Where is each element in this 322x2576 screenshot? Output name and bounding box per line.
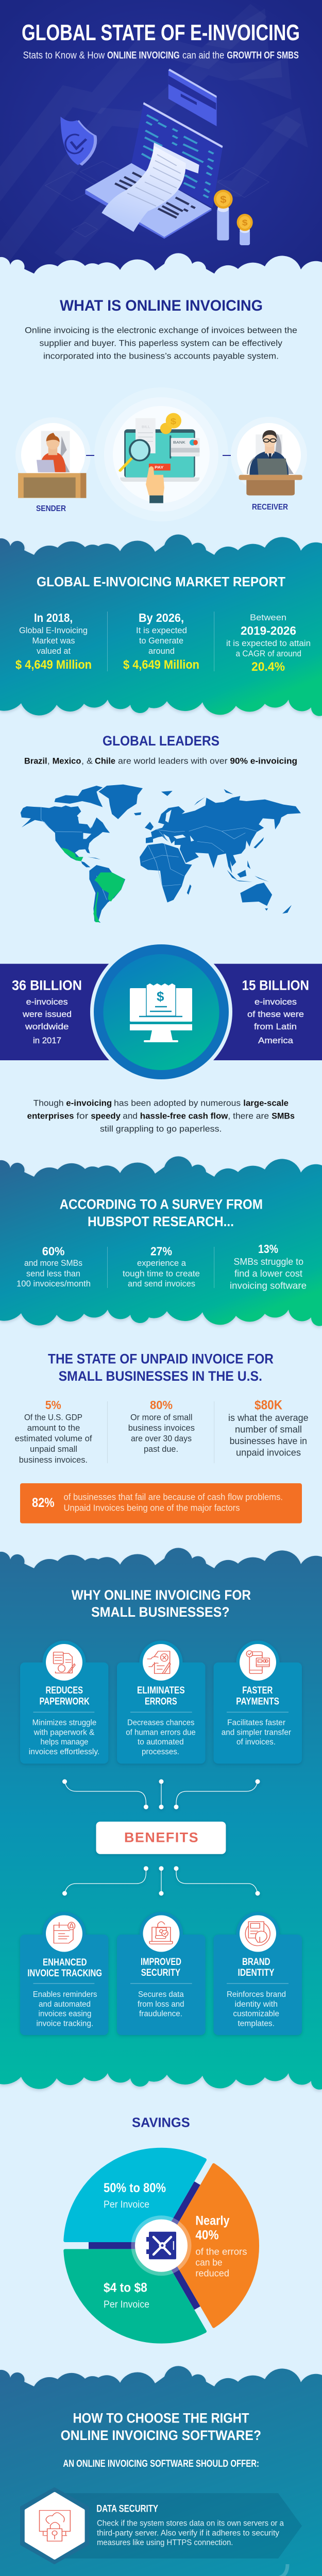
hero subtitle	[23, 50, 299, 61]
card: faster payments: PAYMENTS	[236, 1696, 279, 1707]
callout: 82 percent: 82%	[32, 1496, 55, 1510]
card: reduces paperwork: REDUCES	[45, 1685, 83, 1696]
item: data security: DATA SECURITY	[96, 2504, 158, 2515]
text: online invoicing definition	[25, 326, 297, 361]
stat: 2026 value	[123, 611, 199, 672]
card: reduces paperwork: helps manage	[40, 1738, 88, 1747]
card: improved security: IMPROVED	[141, 1957, 181, 1968]
hero subtitle: ONLINE INVOICING	[107, 50, 180, 61]
card: eliminates errors: of human errors due	[126, 1728, 196, 1737]
card: faster payments: of invoices.	[236, 1738, 276, 1747]
panel: why online invoicing	[0, 1548, 322, 2090]
heading: survey: HUBSPOT RESEARCH...	[88, 1214, 234, 1229]
text: adoption paragraph: e-invoicing	[66, 1098, 112, 1108]
text: adoption paragraph: has been adopted by numerous	[114, 1098, 241, 1108]
text: adoption paragraph: hassle-free cash flow	[140, 1111, 228, 1121]
text: global leaders summary	[24, 757, 297, 766]
stat: CAGR: 20.4%	[251, 660, 285, 674]
card: invoice tracking	[20, 1912, 108, 2035]
stat: 80 percent past due: Or more of small	[130, 1413, 193, 1422]
hero subtitle: can aid the	[182, 50, 224, 61]
card: reduces paperwork: with paperwork &	[33, 1728, 95, 1737]
connectors: out of benefits	[62, 1866, 260, 1896]
card: improved security: Secures data	[138, 1990, 184, 1999]
panel: hubspot survey	[0, 1156, 322, 1326]
stat: 13 percent: SMBs struggle to	[234, 1256, 303, 1267]
callout: benefits	[96, 1822, 226, 1854]
label: sender: SENDER	[36, 504, 66, 513]
slice: orange: can be	[195, 2257, 223, 2267]
slice: green	[65, 2250, 205, 2342]
text: adoption paragraph: speedy	[91, 1111, 121, 1121]
card: brand identity: customizable	[233, 2010, 279, 2019]
stat: CAGR: a CAGR of around	[236, 649, 301, 658]
text: global leaders summary: 90% e-invoicing	[230, 757, 297, 766]
stat: CAGR: it is expected to attain	[226, 638, 311, 648]
card: improved security: SECURITY	[141, 1968, 180, 1978]
stat: 60 percent: send less than	[26, 1269, 80, 1279]
icon: laptop payment: BANK	[173, 440, 186, 445]
stat: 36 billion: e-invoices	[26, 997, 68, 1007]
stat: CAGR: Between	[250, 613, 286, 622]
text: global leaders summary: , &	[81, 757, 93, 766]
card: faster payments	[213, 1640, 302, 1764]
heading: how to choose: HOW TO CHOOSE THE RIGHT	[73, 2410, 249, 2426]
circle: invoice monitor badge: $	[157, 989, 164, 1004]
text: online invoicing definition: supplier and buyer. This paperless system can be effectively	[39, 338, 283, 348]
icon: laptop payment	[94, 387, 228, 521]
card: improved security	[117, 1912, 206, 2035]
stat: 15 billion: America	[258, 1036, 294, 1045]
card: improved security: fraudulence.	[139, 2010, 182, 2019]
icon: brand book and bulb	[245, 1922, 270, 1946]
text: global leaders summary: are world leaders with over	[118, 757, 228, 766]
stat: 2018 value: Global E-Invoicing	[19, 625, 88, 635]
card: brand identity: identity with	[235, 2000, 278, 2009]
slice: blue	[65, 2149, 205, 2241]
card: eliminates errors: ELIMINATES	[137, 1685, 185, 1696]
heading: global leaders: GLOBAL LEADERS	[103, 733, 219, 749]
icon: payments	[246, 1651, 269, 1673]
text: global leaders summary: Mexico	[53, 757, 81, 766]
card: brand identity: Reinforces brand	[227, 1990, 286, 1999]
icon: laptop lock	[149, 1922, 173, 1944]
icon: paperwork	[54, 1652, 75, 1673]
stat: CAGR	[226, 613, 311, 674]
text: adoption paragraph: and	[123, 1111, 138, 1121]
heading: why	[72, 1587, 251, 1620]
card: invoice tracking: invoices easing	[38, 2010, 91, 2019]
card: faster payments: FASTER	[242, 1685, 273, 1696]
hero background	[0, 0, 322, 281]
stat: 2026 value: It is expected	[136, 625, 187, 635]
icon: sender at desk	[15, 417, 91, 498]
card: reduces paperwork: PAPERWORK	[39, 1696, 90, 1707]
text: global leaders summary: Chile	[95, 757, 115, 766]
stat: 5 percent of GDP	[15, 1398, 92, 1465]
stat: CAGR: 2019-2026	[241, 624, 296, 637]
callout: 82 percent: of businesses that fail are because of cash flow problems.	[64, 1492, 283, 1502]
subheading: should offer: AN ONLINE INVOICING SOFTWARE SHOULD OFFER:	[63, 2459, 259, 2469]
slice: orange: reduced	[195, 2268, 229, 2278]
heading: state of unpaid invoice	[48, 1351, 274, 1384]
stat: 5 percent of GDP: unpaid small	[30, 1444, 77, 1454]
stat: 27 percent: tough time to create	[123, 1269, 200, 1279]
dividers	[107, 612, 214, 671]
heading: survey	[60, 1197, 263, 1229]
slice: orange: 40%	[195, 2228, 218, 2243]
callout: 82 percent: Unpaid Invoices being one of the major factors	[64, 1503, 240, 1513]
panel: market report	[0, 534, 322, 716]
card: reduces paperwork: Minimizes struggle	[32, 1718, 96, 1727]
heading: why: WHY ONLINE INVOICING FOR	[72, 1587, 251, 1603]
panel background	[0, 534, 322, 716]
stat: 80 percent past due: business invoices	[128, 1423, 195, 1433]
card: brand identity: IDENTITY	[238, 1968, 275, 1978]
stat: 60 percent: 100 invoices/month	[16, 1279, 91, 1289]
panel background	[0, 1156, 322, 1326]
circle: invoice monitor badge	[90, 941, 232, 1083]
text: adoption paragraph: SMBs	[272, 1111, 295, 1121]
hero illustration: laptop with invoice, card, shield and coins	[61, 69, 253, 245]
stat: 13 percent: 13%	[258, 1242, 278, 1256]
stat: 80K average: $80K	[255, 1398, 282, 1413]
stat: 2018 value: $ 4,649 Million	[15, 658, 92, 672]
stat: 2026 value: around	[148, 646, 175, 656]
slice: green: $4 to $8	[104, 2280, 147, 2295]
stat: 15 billion: e-invoices	[255, 997, 297, 1007]
card: invoice tracking: and automated	[39, 2000, 91, 2009]
stat: 2018 value: Market was	[32, 636, 75, 646]
heading: state of unpaid invoice: THE STATE OF UNPAID INVOICE FOR	[48, 1351, 274, 1367]
panel: how to choose	[0, 2366, 322, 2576]
card: invoice tracking: Enables reminders	[33, 1990, 97, 1999]
card: brand identity: templates.	[238, 2019, 275, 2028]
heading: how to choose	[61, 2410, 261, 2443]
connectors between items	[34, 2564, 287, 2576]
stat: 15 billion: of these were	[247, 1009, 304, 1019]
stat: 80 percent past due	[128, 1398, 195, 1454]
dividers	[107, 1247, 214, 1288]
stat: 5 percent of GDP: amount to the	[27, 1423, 80, 1433]
card: brand identity	[213, 1912, 302, 2035]
item: data security: Check if the system stores data on its own servers or a	[97, 2519, 284, 2528]
band background	[0, 964, 322, 1060]
card: reduces paperwork	[20, 1640, 108, 1764]
card: eliminates errors: processes.	[142, 1748, 179, 1756]
stat: 5 percent of GDP: business invoices.	[19, 1455, 88, 1465]
stat: 27 percent: and send invoices	[128, 1279, 195, 1289]
stat: 80 percent past due: are over 30 days	[131, 1434, 192, 1444]
text: adoption paragraph: enterprises	[27, 1111, 74, 1121]
text: adoption paragraph: Though	[33, 1098, 64, 1108]
panel background	[0, 1548, 322, 2090]
icon: errors	[147, 1651, 171, 1673]
diagram: sender to payment to receiver	[15, 387, 307, 521]
icon: laptop payment: BILL	[142, 425, 150, 429]
card: invoice tracking: ENHANCED	[43, 1957, 87, 1968]
stat: 60 percent	[16, 1245, 91, 1289]
label: receiver: RECEIVER	[252, 503, 288, 512]
text: adoption paragraph: still grappling to go paperless.	[100, 1124, 222, 1134]
stat: 27 percent	[123, 1245, 200, 1289]
card: faster payments: Facilitates faster	[227, 1718, 285, 1727]
text: adoption paragraph: large-scale	[243, 1098, 289, 1108]
callout: benefits: BENEFITS	[124, 1830, 198, 1845]
icon: laptop	[85, 102, 223, 239]
item: data security: measures like using HTTPS connection.	[97, 2538, 233, 2547]
stat: 5 percent of GDP: Of the U.S. GDP	[24, 1413, 82, 1422]
stat: 36 billion: were issued	[22, 1009, 72, 1019]
text: online invoicing definition: Online invoicing is the electronic exchange of invoices between the	[25, 326, 297, 335]
card: eliminates errors: ERRORS	[145, 1696, 177, 1707]
slice: orange	[167, 2165, 258, 2327]
card: improved security: from loss and	[138, 2000, 184, 2009]
card: faster payments: and simpler transfer	[222, 1728, 291, 1737]
stat: 36 billion	[12, 978, 82, 1045]
heading: what is online invoicing: WHAT IS ONLINE INVOICING	[60, 297, 263, 314]
stat: 80K average	[228, 1398, 309, 1458]
callout: 82 percent	[20, 1483, 302, 1523]
stat: 15 billion: from Latin	[254, 1022, 297, 1031]
stat: 13 percent: find a lower cost	[234, 1268, 302, 1279]
text: global leaders summary: Brazil	[24, 757, 47, 766]
stat: 2018 value: valued at	[37, 646, 71, 656]
chart: savings pie	[65, 2149, 258, 2342]
stat: 27 percent: experience a	[137, 1258, 187, 1268]
text: online invoicing definition: incorporated into the business’s accounts payable system.	[43, 351, 279, 361]
slice: green: Per Invoice	[104, 2299, 149, 2310]
stat: 2018 value	[15, 611, 92, 672]
icon: cloud lock	[40, 2511, 70, 2541]
card: invoice tracking: INVOICE TRACKING	[27, 1968, 102, 1979]
stat: 13 percent: invoicing software	[230, 1280, 307, 1291]
icon: coin stacks: $	[242, 218, 248, 227]
icon: laptop payment: $	[171, 416, 176, 426]
icon: credit card	[168, 69, 217, 126]
icon: coin stacks: $	[220, 195, 226, 205]
card: eliminates errors: Decreases chances	[127, 1718, 195, 1727]
item: data security: third-party server. Also verify if it adheres to security	[97, 2529, 279, 2538]
connectors: into benefits	[62, 1780, 260, 1809]
slice: blue: Per Invoice	[104, 2199, 149, 2210]
heading: why: SMALL BUSINESSES?	[91, 1604, 230, 1620]
icon: coin stacks	[214, 190, 253, 245]
card: eliminates errors: to automated	[138, 1738, 184, 1747]
stat: 60 percent: and more SMBs	[24, 1258, 82, 1268]
stat: 80K average: is what the average	[228, 1412, 309, 1423]
arrow: payment to receiver	[223, 451, 237, 461]
chart: world map with leaders highlighted	[21, 785, 301, 923]
heading: savings: SAVINGS	[132, 2114, 190, 2130]
stat: 80K average: number of small	[235, 1424, 302, 1435]
hero subtitle: GROWTH OF SMBS	[227, 50, 299, 61]
heading: how to choose: ONLINE INVOICING SOFTWARE?	[61, 2428, 261, 2443]
stat: 5 percent of GDP: 5%	[45, 1398, 61, 1412]
text: global leaders summary: ,	[47, 757, 50, 766]
stat: 2026 value: By 2026,	[139, 611, 184, 624]
stat: 5 percent of GDP: estimated volume of	[15, 1434, 92, 1444]
stat: 80K average: businesses have in	[230, 1435, 307, 1446]
stat: 13 percent	[230, 1242, 307, 1291]
heading: state of unpaid invoice: SMALL BUSINESSES IN THE U.S.	[59, 1368, 262, 1384]
icon: calendar bell	[54, 1922, 75, 1943]
slice: orange: of the errors	[195, 2247, 247, 2257]
stat: 36 billion: worldwide	[25, 1022, 69, 1031]
icon: receiver at desk	[231, 417, 307, 496]
stat: 80 percent past due: 80%	[150, 1398, 173, 1412]
item: data security	[22, 2489, 302, 2563]
text: adoption paragraph: , there are	[228, 1111, 269, 1121]
stat: 2026 value: $ 4,649 Million	[123, 658, 199, 672]
arrow: sender to payment	[86, 451, 100, 461]
icon: safe	[131, 2215, 192, 2276]
panel background	[0, 2366, 322, 2576]
card: eliminates errors	[117, 1640, 206, 1764]
hero subtitle: Stats to Know & How	[23, 50, 105, 61]
stat: 2018 value: In 2018,	[34, 611, 73, 624]
card: brand identity: BRAND	[242, 1957, 270, 1968]
stat: 80K average: unpaid invoices	[236, 1447, 301, 1458]
stat: 15 billion	[242, 978, 309, 1045]
panel: worldwide invoices band	[0, 941, 322, 1083]
icon: shield	[61, 117, 97, 166]
text: adoption paragraph: for	[76, 1111, 89, 1121]
stat: 60 percent: 60%	[42, 1245, 65, 1258]
card: invoice tracking: invoice tracking.	[36, 2019, 93, 2028]
slice: orange: Nearly	[195, 2213, 230, 2228]
stat: 36 billion: 36 BILLION	[12, 978, 82, 993]
heading: survey: ACCORDING TO A SURVEY FROM	[60, 1197, 263, 1212]
stat: 80 percent past due: past due.	[144, 1444, 178, 1454]
text: adoption paragraph	[27, 1098, 295, 1134]
stat: 15 billion: 15 BILLION	[242, 978, 309, 993]
slice connector bars	[89, 2183, 197, 2308]
stat: 2026 value: to Generate	[139, 636, 183, 646]
dividers	[107, 1401, 214, 1463]
slice: blue: 50% to 80%	[104, 2181, 166, 2195]
stat: 36 billion: in 2017	[33, 1036, 61, 1045]
heading: market report: GLOBAL E-INVOICING MARKET REPORT	[37, 574, 285, 589]
stat: 27 percent: 27%	[150, 1245, 172, 1258]
icon: laptop payment: PAY	[155, 465, 164, 469]
card: reduces paperwork: invoices effortlessly.	[29, 1748, 99, 1756]
